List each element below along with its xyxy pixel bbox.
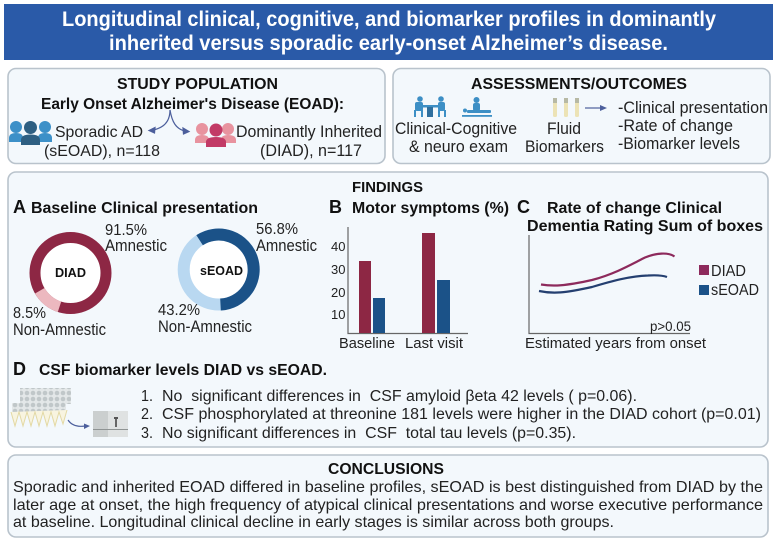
list: CSF results: CSF phosphorylated at threonine 181 levels were higher in the DIAD cohort (p=0.01) bbox=[162, 406, 761, 423]
section B: motor symptoms: Motor symptoms (%) bbox=[352, 200, 509, 217]
section A: baseline clinical presentation: Baseline Clinical presentation bbox=[31, 200, 258, 217]
list: CSF results: 1. bbox=[141, 388, 153, 405]
bar chart: motor symptoms: 20 bbox=[331, 285, 345, 300]
donut: sEOAD bbox=[184, 234, 254, 304]
text: sporadic AD bbox=[44, 124, 160, 160]
heading: study population: STUDY POPULATION bbox=[117, 76, 278, 93]
section D: CSF biomarkers: D bbox=[13, 359, 26, 379]
heading: assessments: ASSESSMENTS/OUTCOMES bbox=[471, 76, 687, 93]
labels: sEOAD percentages: 43.2% bbox=[158, 302, 200, 319]
donut: DIAD bbox=[35, 238, 106, 308]
subheading: EOAD: Early Onset Alzheimer's Disease (EOAD): bbox=[41, 96, 344, 113]
icon: sample plate bbox=[11, 388, 71, 426]
icon: fluid tubes bbox=[553, 98, 579, 117]
title: inherited versus sporadic early-onset Alzheimer’s disease. bbox=[109, 31, 668, 55]
list: CSF results: No significant differences in CSF amyloid βeta 42 levels ( p=0.06). bbox=[162, 388, 637, 405]
text: conclusions body: Sporadic and inherited EOAD differed in baseline profiles, sEOAD is best distinguished from DIAD by the bbox=[13, 479, 763, 496]
text: outcomes list: -Biomarker levels bbox=[618, 135, 740, 153]
text: sporadic AD: (sEOAD), n=118 bbox=[44, 143, 160, 160]
section D: CSF biomarkers bbox=[11, 359, 761, 442]
title: Longitudinal clinical, cognitive, and biomarker profiles in dominantly bbox=[62, 7, 716, 31]
heading: findings: FINDINGS bbox=[352, 179, 423, 196]
text: conclusions body: later age at onset, the high frequency of atypical clinical presentations and worse executive performance bbox=[13, 497, 763, 514]
list: CSF results bbox=[141, 388, 761, 442]
arrows: split to groups bbox=[149, 110, 189, 134]
labels: DIAD percentages: Non-Amnestic bbox=[13, 321, 106, 339]
section D: CSF biomarkers: CSF biomarker levels DIAD vs sEOAD. bbox=[39, 362, 327, 379]
header banner bbox=[4, 4, 773, 60]
bar chart: motor symptoms: Last visit bbox=[405, 335, 464, 352]
bar chart: motor symptoms: 30 bbox=[331, 262, 345, 277]
list: CSF results: 3. bbox=[141, 425, 153, 442]
labels: sEOAD percentages: Non-Amnestic bbox=[158, 318, 252, 336]
icon: sporadic group bbox=[9, 121, 52, 145]
text: conclusions body bbox=[13, 479, 763, 531]
line chart: CDR sum of boxes: Estimated years from onset bbox=[525, 335, 707, 352]
text: outcomes list: -Rate of change bbox=[618, 117, 733, 135]
bar chart: motor symptoms: 40 bbox=[331, 239, 345, 254]
list: CSF results: No significant differences in CSF total tau levels (p=0.35). bbox=[162, 425, 576, 442]
text: fluid biomarkers: Fluid bbox=[547, 120, 581, 138]
section A: baseline clinical presentation: A bbox=[13, 197, 26, 217]
bar chart: motor symptoms: 10 bbox=[331, 307, 345, 322]
donut: DIAD: DIAD bbox=[55, 266, 86, 280]
text: clinical cognitive: Clinical-Cognitive bbox=[395, 120, 517, 138]
icon: inherited group bbox=[195, 123, 236, 147]
labels: sEOAD percentages: Amnestic bbox=[256, 237, 317, 255]
panel: study population bbox=[8, 68, 385, 164]
arrow: to outcomes bbox=[585, 105, 607, 111]
arrow: plate to machine bbox=[68, 420, 90, 429]
panel: findings bbox=[8, 172, 768, 447]
text: clinical cognitive: & neuro exam bbox=[409, 138, 508, 156]
section C: rate of change bbox=[517, 197, 763, 352]
text: outcomes list: -Clinical presentation bbox=[618, 99, 768, 117]
section B: motor symptoms bbox=[329, 197, 509, 352]
section A: baseline clinical presentation bbox=[13, 197, 317, 339]
panel: assessments and outcomes bbox=[393, 68, 770, 164]
list: CSF results: 2. bbox=[141, 406, 153, 423]
labels: sEOAD percentages bbox=[158, 221, 317, 336]
icon: clinical interview bbox=[414, 96, 446, 117]
legend bbox=[699, 263, 759, 299]
text: fluid biomarkers: Biomarkers bbox=[525, 138, 604, 156]
donut: sEOAD: sEOAD bbox=[200, 264, 243, 278]
heading: conclusions: CONCLUSIONS bbox=[328, 461, 444, 478]
text: sporadic AD: Sporadic AD bbox=[55, 124, 143, 141]
section C: rate of change: C bbox=[517, 197, 530, 217]
labels: DIAD percentages: 91.5% bbox=[105, 222, 147, 239]
text: dominantly inherited bbox=[236, 123, 382, 160]
text: dominantly inherited: (DIAD), n=117 bbox=[260, 142, 362, 160]
text: dominantly inherited: Dominantly Inherited bbox=[236, 123, 382, 141]
line chart: CDR sum of boxes bbox=[525, 235, 707, 352]
text: conclusions body: at baseline. Longitudinal clinical decline in early stages is similar across both groups. bbox=[13, 514, 614, 531]
bar chart: motor symptoms: Baseline bbox=[339, 335, 395, 352]
text: fluid biomarkers bbox=[525, 120, 604, 156]
text: outcomes list bbox=[618, 99, 768, 153]
title bbox=[62, 7, 716, 55]
panel: conclusions bbox=[8, 455, 768, 537]
line chart: CDR sum of boxes: p>0.05 bbox=[650, 318, 691, 334]
labels: DIAD percentages: Amnestic bbox=[105, 237, 167, 255]
legend: sEOAD bbox=[711, 282, 759, 299]
section B: motor symptoms: B bbox=[329, 197, 342, 217]
labels: sEOAD percentages: 56.8% bbox=[256, 221, 298, 238]
bar chart: motor symptoms bbox=[331, 227, 468, 352]
icon: neuro exam bbox=[462, 97, 492, 117]
legend: DIAD bbox=[711, 263, 746, 280]
text: clinical cognitive bbox=[395, 120, 517, 156]
section C: rate of change: Rate of change Clinical bbox=[547, 200, 722, 217]
icon: analyser machine bbox=[93, 411, 128, 437]
labels: DIAD percentages bbox=[13, 222, 167, 339]
section C: rate of change: Dementia Rating Sum of boxes bbox=[527, 218, 763, 235]
labels: DIAD percentages: 8.5% bbox=[13, 305, 46, 322]
